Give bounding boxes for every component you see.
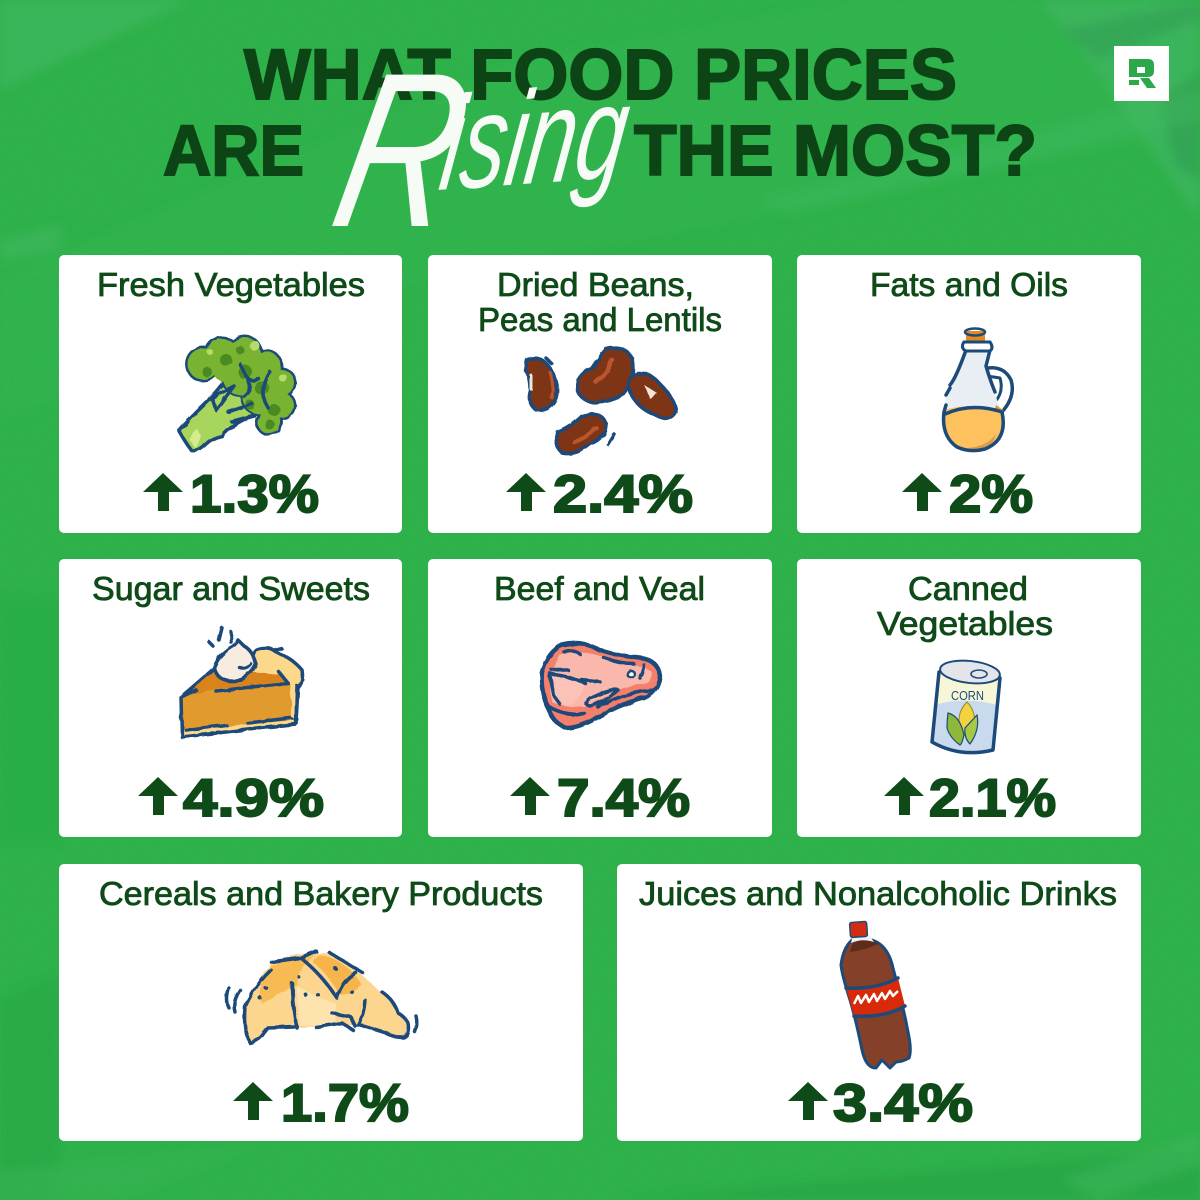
panel: fresh vegetables bbox=[59, 255, 402, 533]
icon: broccoli bbox=[179, 335, 297, 451]
value: up 2.1%: 2.1% bbox=[929, 769, 1056, 828]
panel: canned vegetables bbox=[797, 559, 1141, 837]
panel: cereals and bakery products bbox=[59, 864, 583, 1141]
panel: sugar and sweets bbox=[59, 559, 402, 837]
heading: fresh vegetables: Fresh Vegetables bbox=[97, 266, 365, 303]
value: up 3.4%: 3.4% bbox=[833, 1074, 973, 1133]
heading: dried beans, peas and lentils bbox=[478, 266, 722, 338]
icon: kidney beans bbox=[525, 348, 676, 454]
heading: beef and veal: Beef and Veal bbox=[494, 570, 705, 607]
icon: croissant bbox=[227, 951, 417, 1043]
heading: canned vegetables bbox=[877, 570, 1053, 642]
heading: canned vegetables: Vegetables bbox=[877, 605, 1053, 642]
title: What food prices are rising the most?: R bbox=[317, 26, 489, 273]
title: What food prices are rising the most?: WHAT FOOD PRICES bbox=[244, 36, 957, 115]
logo: R badge bbox=[1114, 46, 1169, 101]
icon: oil bottle with cork bbox=[943, 328, 1012, 451]
value: up 7.4% bbox=[510, 769, 690, 828]
heading: fats and oils: Fats and Oils bbox=[870, 266, 1068, 303]
value: up 1.7% bbox=[233, 1074, 409, 1133]
title: What food prices are rising the most?: ARE bbox=[163, 112, 304, 191]
value: up 3.4% bbox=[788, 1074, 973, 1133]
value: up 2% bbox=[902, 465, 1033, 524]
value: up 1.3% bbox=[143, 465, 319, 524]
title: What food prices are rising the most? bbox=[163, 26, 1037, 273]
heading: juices and nonalcoholic drinks: Juices and Nonalcoholic Drinks bbox=[639, 875, 1117, 912]
icon: can of corn: CORN bbox=[951, 688, 984, 703]
value: up 1.7%: 1.7% bbox=[281, 1074, 409, 1133]
heading: dried beans, peas and lentils: Dried Beans, bbox=[497, 266, 694, 303]
value: up 1.3%: 1.3% bbox=[190, 465, 319, 524]
heading: canned vegetables: Canned bbox=[908, 570, 1028, 607]
value: up 2.4% bbox=[506, 465, 693, 524]
heading: cereals and bakery products: Cereals and Bakery Products bbox=[99, 875, 543, 912]
heading: sugar and sweets: Sugar and Sweets bbox=[92, 570, 370, 607]
value: up 2%: 2% bbox=[949, 465, 1033, 524]
icon: can of corn bbox=[931, 658, 1001, 753]
icon: slice of pie bbox=[181, 628, 302, 738]
heading: dried beans, peas and lentils: Peas and Lentils bbox=[478, 301, 722, 338]
panel: fats and oils bbox=[797, 255, 1141, 533]
panel: beef and veal bbox=[428, 559, 772, 837]
panel: dried beans, peas and lentils bbox=[428, 255, 772, 533]
title: What food prices are rising the most?: THE MOST? bbox=[634, 112, 1037, 191]
panel: juices and nonalcoholic drinks bbox=[617, 864, 1141, 1141]
value: up 7.4%: 7.4% bbox=[557, 769, 690, 828]
value: up 4.9% bbox=[138, 769, 324, 828]
icon: beef steak bbox=[542, 643, 660, 728]
value: up 2.4%: 2.4% bbox=[553, 465, 693, 524]
title: What food prices are rising the most?: ising bbox=[433, 57, 638, 219]
icon: soda bottle bbox=[841, 921, 910, 1068]
value: up 4.9%: 4.9% bbox=[183, 769, 324, 828]
